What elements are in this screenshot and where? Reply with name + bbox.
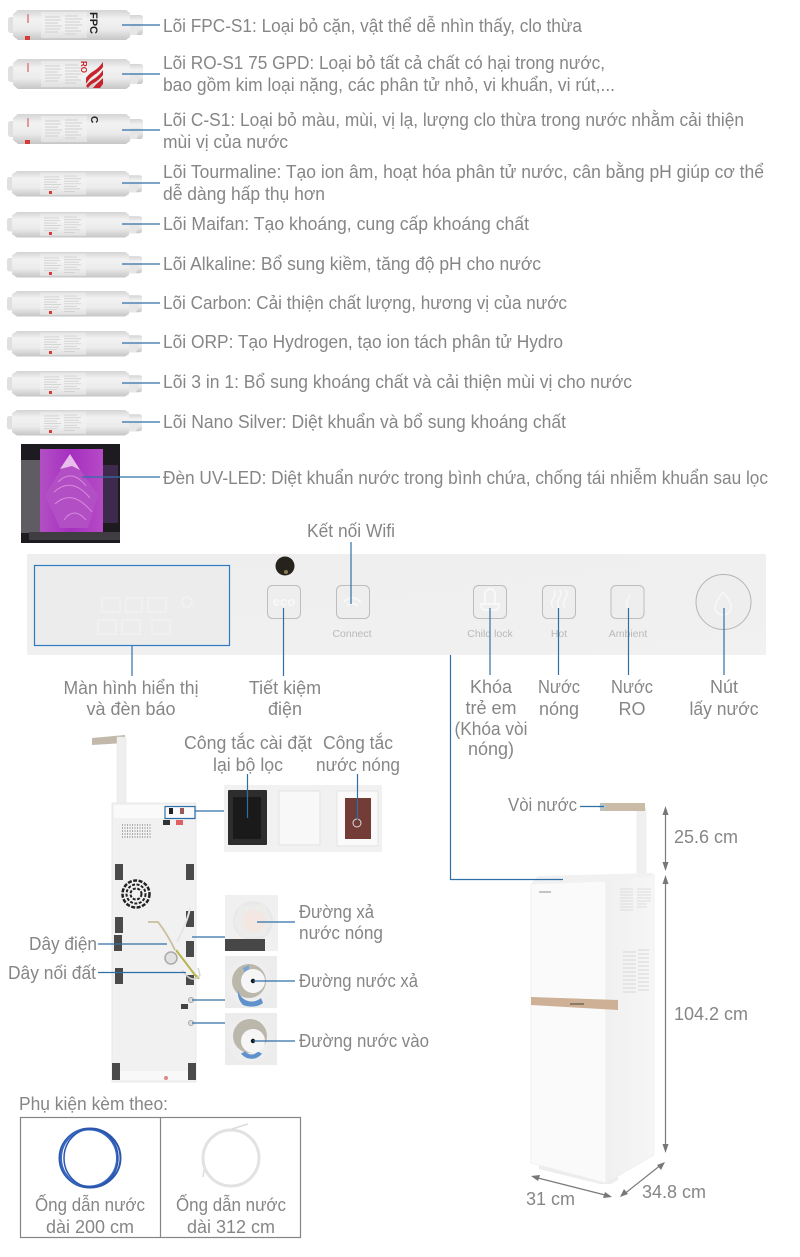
filter: RO-S1: RO [79,61,88,73]
label: power cord [29,934,167,954]
child lock button: (Khóa vòi [454,719,528,739]
label: hot water switch: Công tắc [323,732,393,753]
eco button: Tiết kiệm [249,678,321,698]
child lock button: nóng) [468,739,514,759]
dimension: faucet height [662,806,738,871]
white water tube: Ống dẫn nước [176,1194,286,1215]
white water tube: dài 312 cm [187,1217,275,1237]
inlet line photo and label [192,1013,429,1065]
dimension: body height [662,875,748,1153]
filter: Maifan: Lõi Maifan: Tạo khoáng, cung cấp khoáng chất [163,214,529,234]
ambient water button: Nước [611,677,653,697]
filter: Carbon: Lõi Carbon: Cải thiện chất lượng, hương vị của nước [163,293,567,313]
hot drain photo and label [192,895,383,951]
hot water button: Hot [551,628,567,640]
display area: và đèn báo [86,699,176,719]
dimension: depth: 34.8 cm [642,1182,706,1202]
dispense button: lấy nước [690,699,758,719]
filter: RO-S1: bao gồm kim loại nặng, các phân tử nhỏ, vi khuẩn, vi rút,... [163,75,615,95]
child lock button: Khóa [470,677,513,697]
filter: FPC-S1 [8,10,583,40]
dimension: depth [620,1162,706,1202]
hot drain photo and label: Đường xả [299,902,375,922]
filter: RO-S1 [8,53,615,95]
filter: Tourmaline: Lõi Tourmaline: Tạo ion âm, hoạt hóa phân tử nước, cân bằng pH giúp cơ thể [163,161,764,182]
blue water tube: dài 200 cm [46,1217,134,1237]
dispense button [690,574,758,719]
filter: ORP: Lõi ORP: Tạo Hydrogen, tạo ion tách phân tử Hydro [163,332,563,352]
filter: FPC-S1: FPC [87,12,99,34]
connector: child lock to machine [450,655,563,880]
eco button [249,586,321,719]
white water tube [176,1124,286,1237]
label: reset filter switch [184,732,312,818]
blue water tube: Ống dẫn nước [35,1194,145,1215]
switch close-up photo [224,785,382,852]
dimension: width: 31 cm [526,1189,575,1209]
hot water button: nóng [539,699,579,719]
child lock button: trẻ em [465,698,517,718]
dispense button: Nút [710,677,738,697]
blue water tube [35,1128,145,1237]
ambient water button: Ambient [609,628,647,640]
UV-LED lamp photo and label: Đèn UV-LED: Diệt khuẩn nước trong bình chứa, chống tái nhiễm khuẩn sau lọc [163,467,768,488]
filter: Nano Silver: Lõi Nano Silver: Diệt khuẩn và bổ sung khoáng chất [163,412,566,432]
wifi button [307,521,395,640]
dimension: body height: 104.2 cm [674,1004,748,1024]
label: reset filter switch: Công tắc cài đặt [184,732,312,753]
indicator dot [276,556,294,576]
filter: C-S1 [8,109,744,152]
filter: 3 in 1 [7,371,632,396]
drain line photo and label [192,956,419,1008]
accessories table [20,1117,300,1238]
rear view of machine [92,735,200,1082]
dimension: faucet height: 25.6 cm [674,827,738,847]
filter: Alkaline [7,252,541,278]
display area: Màn hình hiển thị [64,678,198,698]
filter: Tourmaline [7,161,764,204]
inlet line photo and label: Đường nước vào [299,1031,429,1051]
filter: C-S1: C [88,116,99,123]
filter: Maifan [7,212,529,238]
dimension: width [526,1175,612,1209]
drain line photo and label: Đường nước xả [299,971,419,991]
control panel [27,521,766,759]
filter: Nano Silver [7,410,566,436]
filter: C-S1: mùi vị của nước [163,132,288,152]
label: hot water switch [316,732,400,820]
switch locator box [165,806,224,818]
child lock button [454,586,528,759]
filter: C-S1: Lõi C-S1: Loại bỏ màu, mùi, vị lạ, lượng clo thừa trong nước nhằm cải thiện [163,109,744,130]
label: faucet: Vòi nước [508,795,577,815]
filter: Carbon [7,291,567,316]
hot water button [538,586,580,719]
label: power cord: Dây điện [29,934,97,954]
filter: RO-S1: Lõi RO-S1 75 GPD: Loại bỏ tất cả chất có hại trong nước, [163,53,605,73]
hot water button: Nước [538,677,580,697]
display area [34,566,230,719]
label: hot water switch: nước nóng [316,755,400,775]
filter: Tourmaline: dễ dàng hấp thụ hơn [163,183,325,204]
filter: FPC-S1: Lõi FPC-S1: Loại bỏ cặn, vật thể dễ nhìn thấy, clo thừa [163,15,583,36]
child lock button: Child lock [467,628,514,640]
wifi button: Connect [332,628,372,640]
hot drain photo and label: nước nóng [299,923,383,943]
eco button: điện [268,699,302,719]
ambient water button: RO [618,699,646,719]
ambient water button [609,586,653,719]
label: reset filter switch: lại bộ lọc [213,755,283,775]
UV-LED lamp photo and label [21,444,768,543]
filter: 3 in 1: Lõi 3 in 1: Bổ sung khoáng chất và cải thiện mùi vị cho nước [163,372,632,392]
water dispenser front view [531,803,654,1184]
filter: ORP [7,331,563,356]
eco button: eco [273,594,295,609]
filter: Alkaline: Lõi Alkaline: Bổ sung kiềm, tăng độ pH cho nước [163,254,541,274]
label: ground wire: Dây nối đất [8,963,96,983]
accessories heading: Phụ kiện kèm theo: [19,1094,168,1114]
wifi button: Kết nối Wifi [307,521,395,541]
